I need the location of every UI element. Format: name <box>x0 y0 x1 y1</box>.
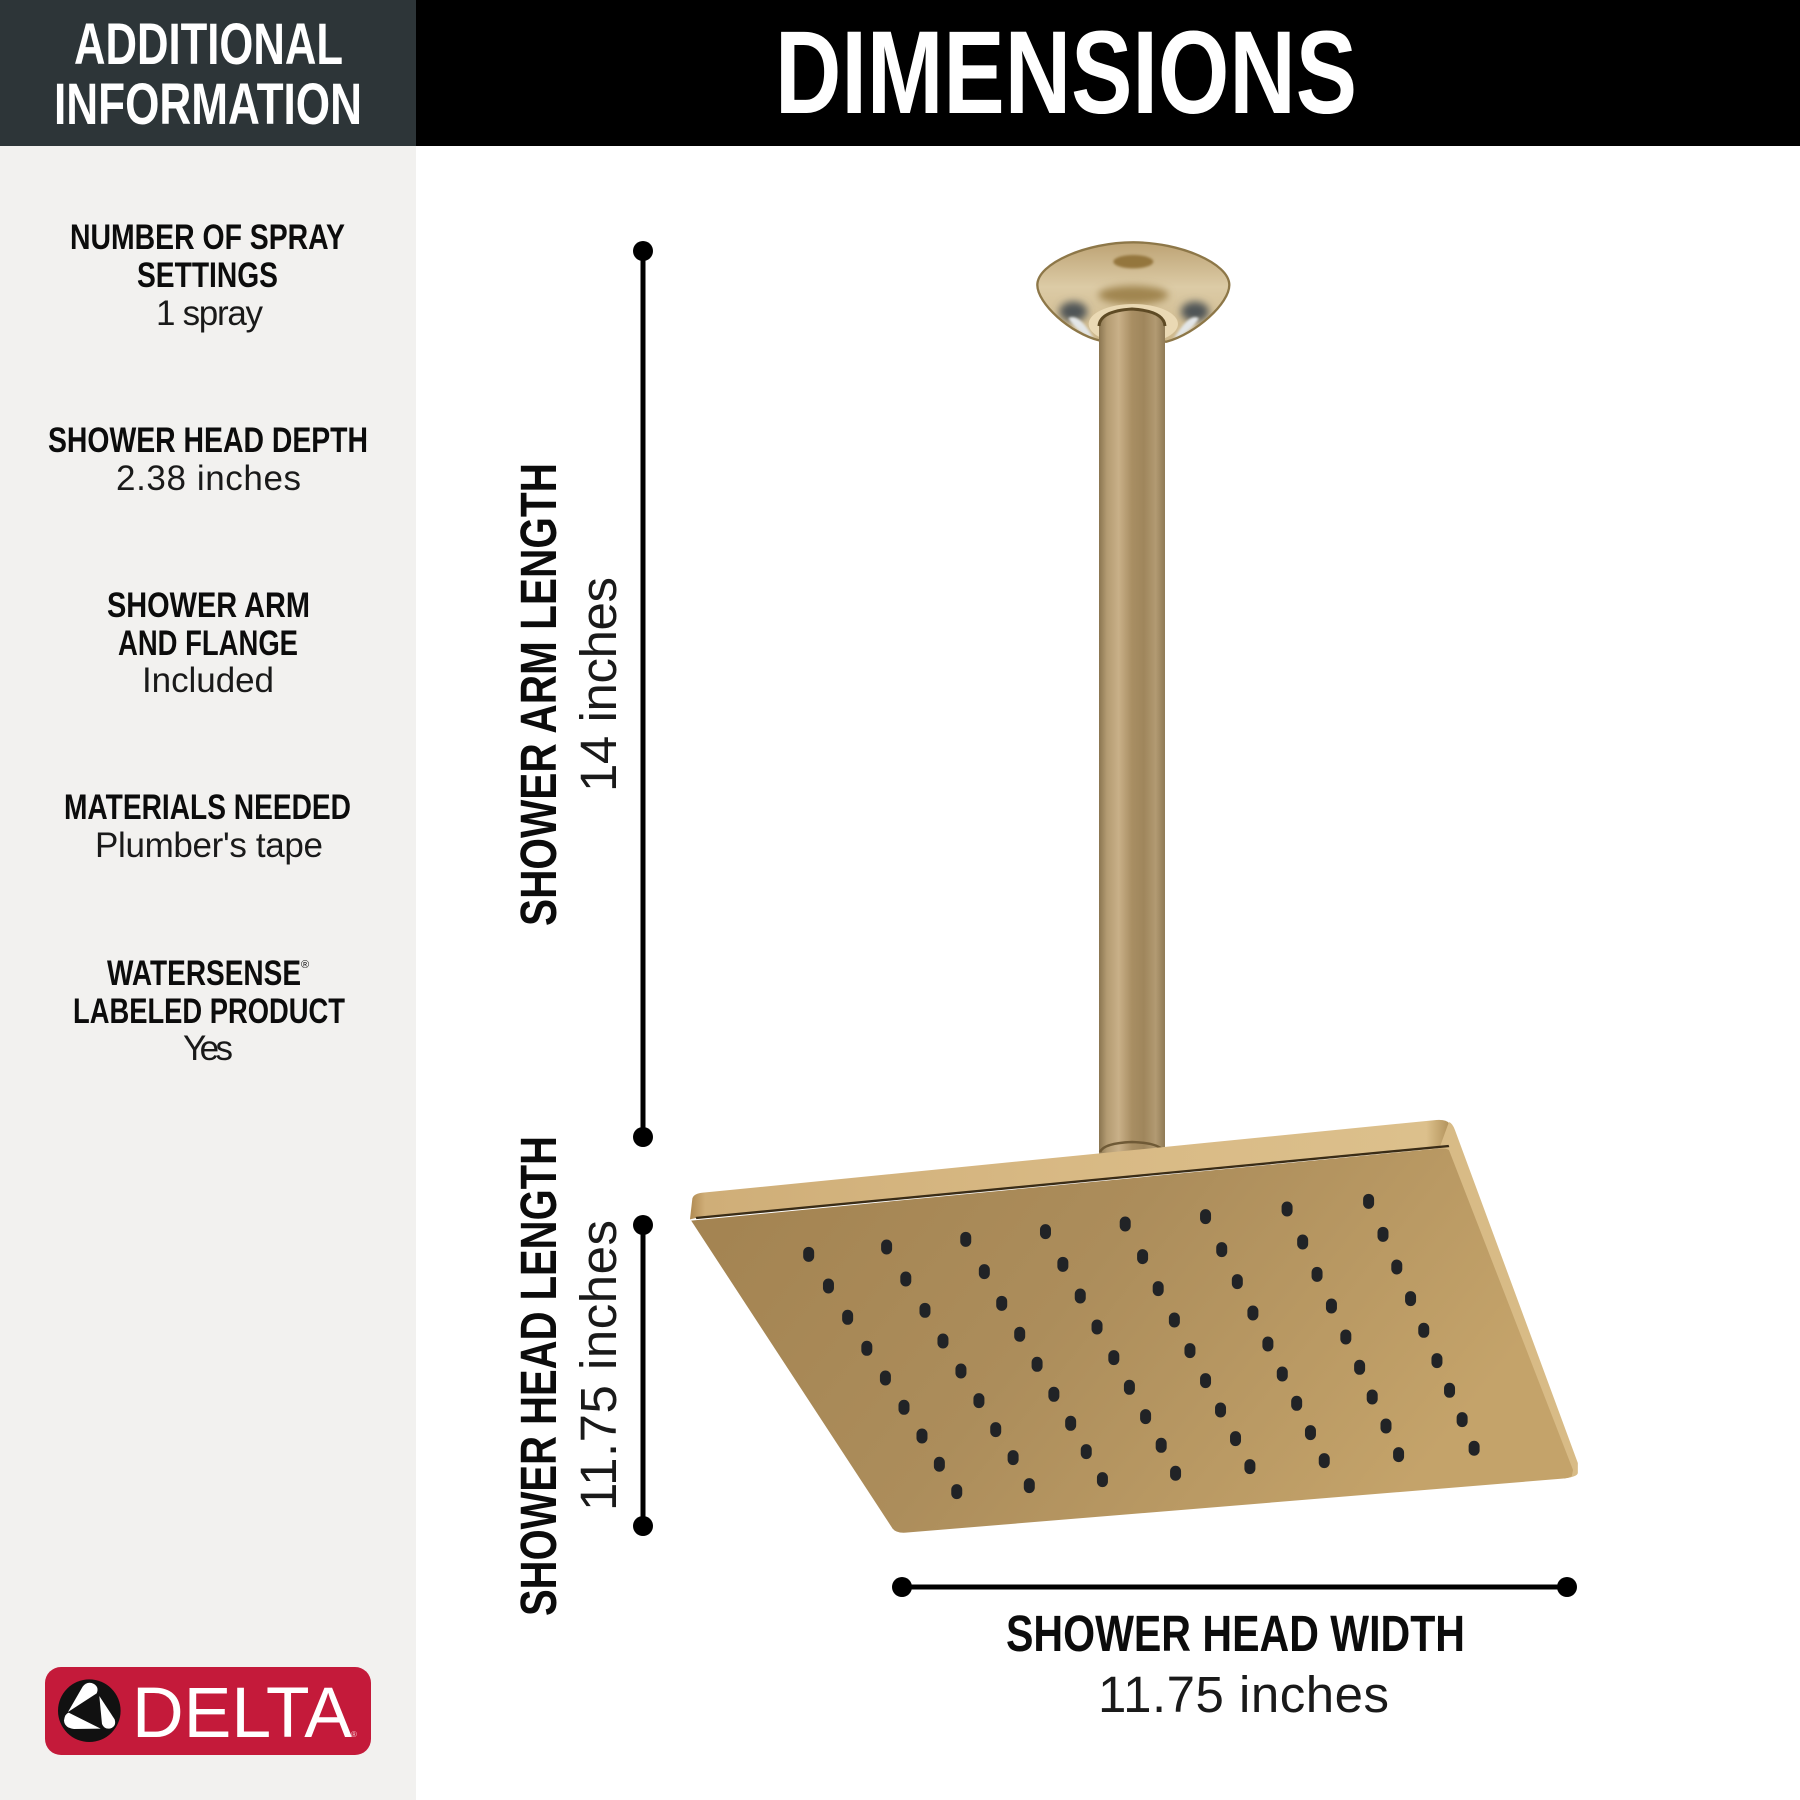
head right bevel <box>1439 1122 1578 1478</box>
sidebar heading <box>0 0 416 146</box>
spec: shower head depth <box>48 420 368 498</box>
spec: watersense labeled product: LABELED PRODUCT <box>73 991 345 1031</box>
logo: Delta <box>45 1667 371 1755</box>
label: shower head width: SHOWER HEAD WIDTH <box>1006 1605 1465 1662</box>
flange <box>1037 242 1229 344</box>
spec: shower arm and flange: SHOWER ARM <box>107 585 310 625</box>
label: shower head width <box>1006 1605 1465 1723</box>
spec: materials needed <box>64 787 351 865</box>
spec: materials needed: Plumber's tape <box>95 826 323 865</box>
illustration: shower arm and flange <box>1037 242 1229 1154</box>
spec: watersense labeled product: WATERSENSE <box>107 953 301 993</box>
spec: number of spray settings: NUMBER OF SPRAY <box>70 217 345 257</box>
illustration: square shower head <box>690 1120 1578 1533</box>
spec: watersense labeled product: Yes <box>183 1029 233 1068</box>
spec: shower arm and flange <box>107 585 310 700</box>
spray nozzles <box>809 1199 1474 1494</box>
spec: watersense labeled product <box>73 953 345 1068</box>
head top rim <box>690 1120 1449 1219</box>
sidebar heading: ADDITIONAL <box>74 12 343 77</box>
spec: watersense labeled product: ® <box>301 959 309 971</box>
spec: shower head depth: SHOWER HEAD DEPTH <box>48 420 368 460</box>
panel: sidebar background <box>0 0 416 1800</box>
label: shower head length <box>510 1136 627 1616</box>
panel: title bar <box>416 0 1800 146</box>
label: shower head width: 11.75 inches <box>1098 1666 1389 1723</box>
spec: shower head depth: 2.38 inches <box>116 459 301 498</box>
label: shower arm length <box>510 463 627 926</box>
spec: number of spray settings: SETTINGS <box>137 255 278 295</box>
label: shower arm length: SHOWER ARM LENGTH <box>510 463 567 926</box>
dimension line: shower head width <box>892 1577 1577 1597</box>
label: shower arm length: 14 inches <box>570 577 627 792</box>
label: shower head length: SHOWER HEAD LENGTH <box>510 1136 567 1616</box>
title: DIMENSIONS <box>775 7 1357 139</box>
spec: shower arm and flange: AND FLANGE <box>118 623 298 663</box>
arm <box>1099 309 1165 1154</box>
logo: Delta: DELTA <box>132 1674 353 1753</box>
dimension line: shower arm length <box>633 241 653 1147</box>
head face <box>691 1148 1573 1533</box>
spec: shower arm and flange: Included <box>142 661 274 700</box>
spec: number of spray settings: 1 spray <box>156 294 264 333</box>
logo: Delta: ® <box>351 1730 357 1739</box>
spec: materials needed: MATERIALS NEEDED <box>64 787 351 827</box>
sidebar heading: INFORMATION <box>54 72 362 137</box>
dimension line: shower head length <box>633 1215 653 1536</box>
head seam <box>696 1146 1449 1218</box>
arm collar <box>1100 1142 1164 1152</box>
label: shower head length: 11.75 inches <box>570 1220 627 1511</box>
spec: number of spray settings <box>70 217 345 333</box>
